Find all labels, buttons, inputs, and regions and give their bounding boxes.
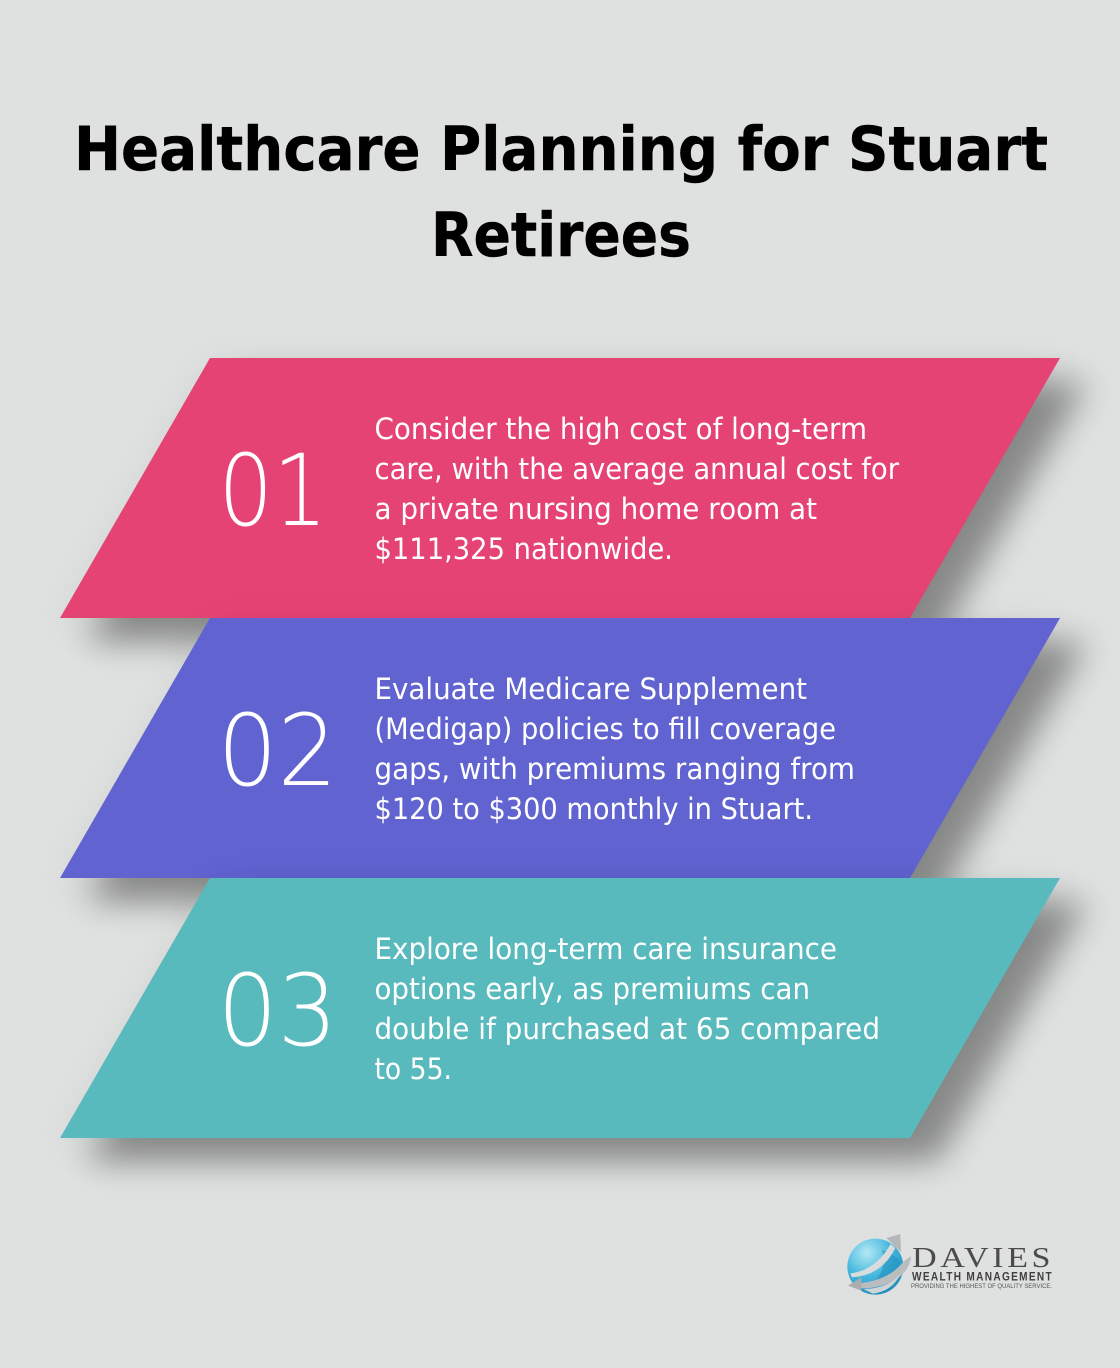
text: step 01 description: a private nursing home room at xyxy=(374,492,817,526)
text: step 01 description xyxy=(374,412,899,566)
text: step 03 description: to 55. xyxy=(374,1052,452,1086)
logo subtitle: WEALTH MANAGEMENT xyxy=(912,1272,1053,1284)
text: step 01 description: Consider the high cost of long-term xyxy=(374,412,867,446)
logo wordmark: DAVIES xyxy=(912,1242,1054,1274)
text: step 02 description xyxy=(374,672,855,826)
title: Retirees xyxy=(431,200,691,271)
text: step 03 description: Explore long-term care insurance xyxy=(374,932,837,966)
logo tagline: PROVIDING THE HIGHEST OF QUALITY SERVICE. xyxy=(911,1284,1052,1290)
panel: step 01 xyxy=(60,358,1088,642)
text: step 02 description: gaps, with premiums ranging from xyxy=(374,752,855,786)
step number 02: 02 xyxy=(218,694,338,809)
step number 03: 03 xyxy=(218,954,338,1069)
icon: globe with arrows xyxy=(847,1234,911,1295)
text: step 02 description: Evaluate Medicare Supplement xyxy=(374,672,807,706)
text: step 03 description: double if purchased at 65 compared xyxy=(374,1012,880,1046)
step number 01: 01 xyxy=(218,434,328,549)
text: step 02 description: (Medigap) policies to fill coverage xyxy=(374,712,836,746)
panel: step 02 xyxy=(60,618,1088,902)
title xyxy=(74,114,1048,271)
text: step 02 description: $120 to $300 monthly in Stuart. xyxy=(374,792,813,826)
text: step 03 description xyxy=(374,932,880,1086)
panel: step 03 xyxy=(60,878,1088,1162)
logo: Davies Wealth Management xyxy=(847,1234,1054,1295)
text: step 01 description: $111,325 nationwide. xyxy=(374,532,673,566)
text: step 03 description: options early, as premiums can xyxy=(374,972,810,1006)
text: step 01 description: care, with the average annual cost for xyxy=(374,452,899,486)
title: Healthcare Planning for Stuart xyxy=(74,114,1048,185)
